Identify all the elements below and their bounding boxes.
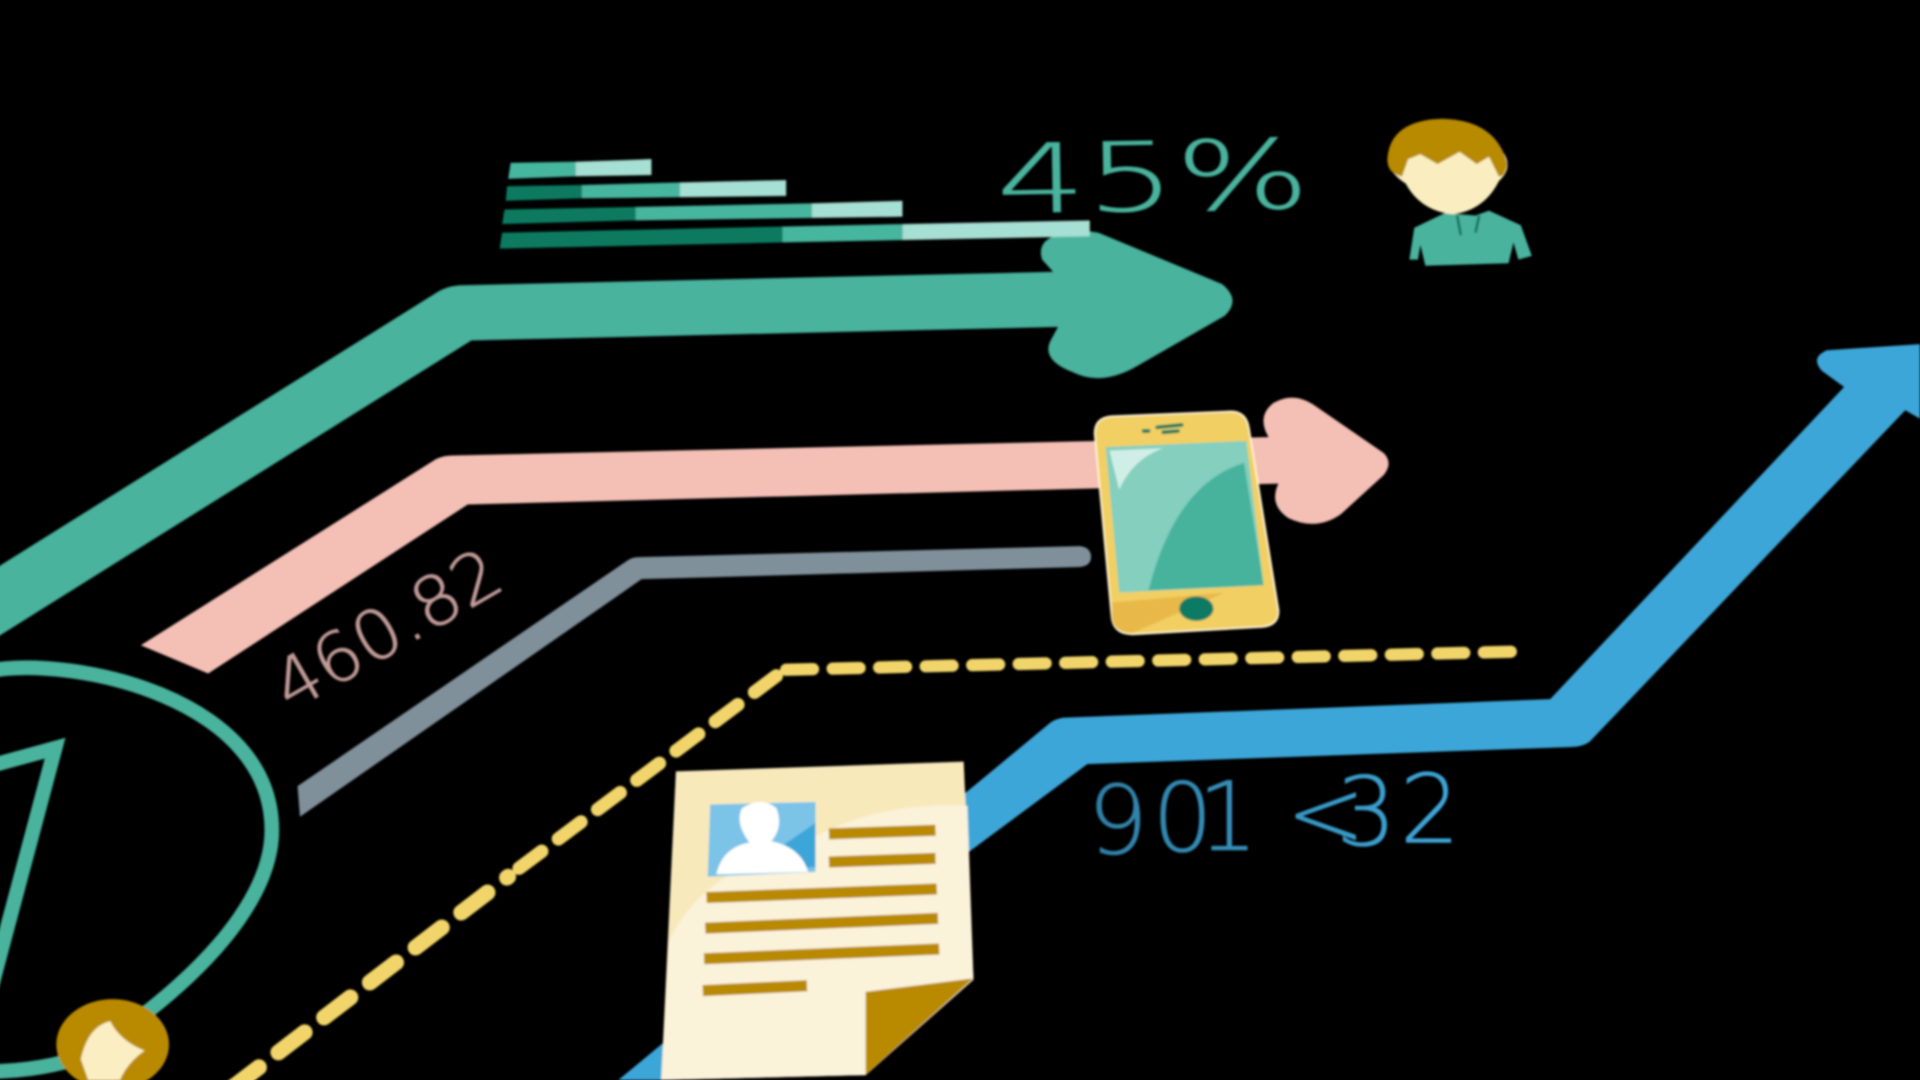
- icon: teal triangle outline: [0, 748, 55, 992]
- line: grey: [298, 546, 1091, 817]
- document sheet: [661, 762, 973, 1080]
- photo: [708, 802, 816, 877]
- phone body: [1095, 411, 1278, 634]
- document text lines: [703, 830, 939, 991]
- text: 901 <32: 901 <32: [1087, 753, 1460, 876]
- icon: teal circle: [0, 668, 272, 1071]
- phone screen dark sweep: [1149, 463, 1264, 590]
- bar row 1: [508, 159, 651, 179]
- line: yellow dashed: [233, 651, 1522, 1080]
- document lighter panel: [661, 805, 973, 1080]
- bar row 3: [502, 201, 902, 224]
- stacked bar chart: [500, 159, 1090, 249]
- icon: resume document: [661, 762, 973, 1080]
- icon: gold ball: [56, 999, 169, 1080]
- person tie: [1457, 216, 1479, 235]
- person face: [1388, 137, 1508, 214]
- phone screen: [1106, 441, 1264, 593]
- arrow: teal: [0, 231, 1232, 639]
- phone speaker marks: [1144, 425, 1182, 432]
- phone lower shading: [1112, 593, 1224, 633]
- phone home button: [1179, 596, 1213, 621]
- phone screen highlight: [1109, 448, 1163, 490]
- person body: [1409, 211, 1532, 266]
- bar row 2: [506, 180, 786, 201]
- arrow: pink: [141, 398, 1389, 673]
- icon: smartphone: [1095, 411, 1278, 634]
- document fold: [866, 978, 973, 1075]
- bar row 4: [500, 220, 1090, 249]
- arrow: blue rising: [618, 344, 1920, 1080]
- icon: person: [1387, 119, 1532, 266]
- person hair: [1387, 119, 1507, 176]
- text: 460.82: 460.82: [259, 533, 516, 727]
- text: 45%: 45%: [995, 119, 1311, 236]
